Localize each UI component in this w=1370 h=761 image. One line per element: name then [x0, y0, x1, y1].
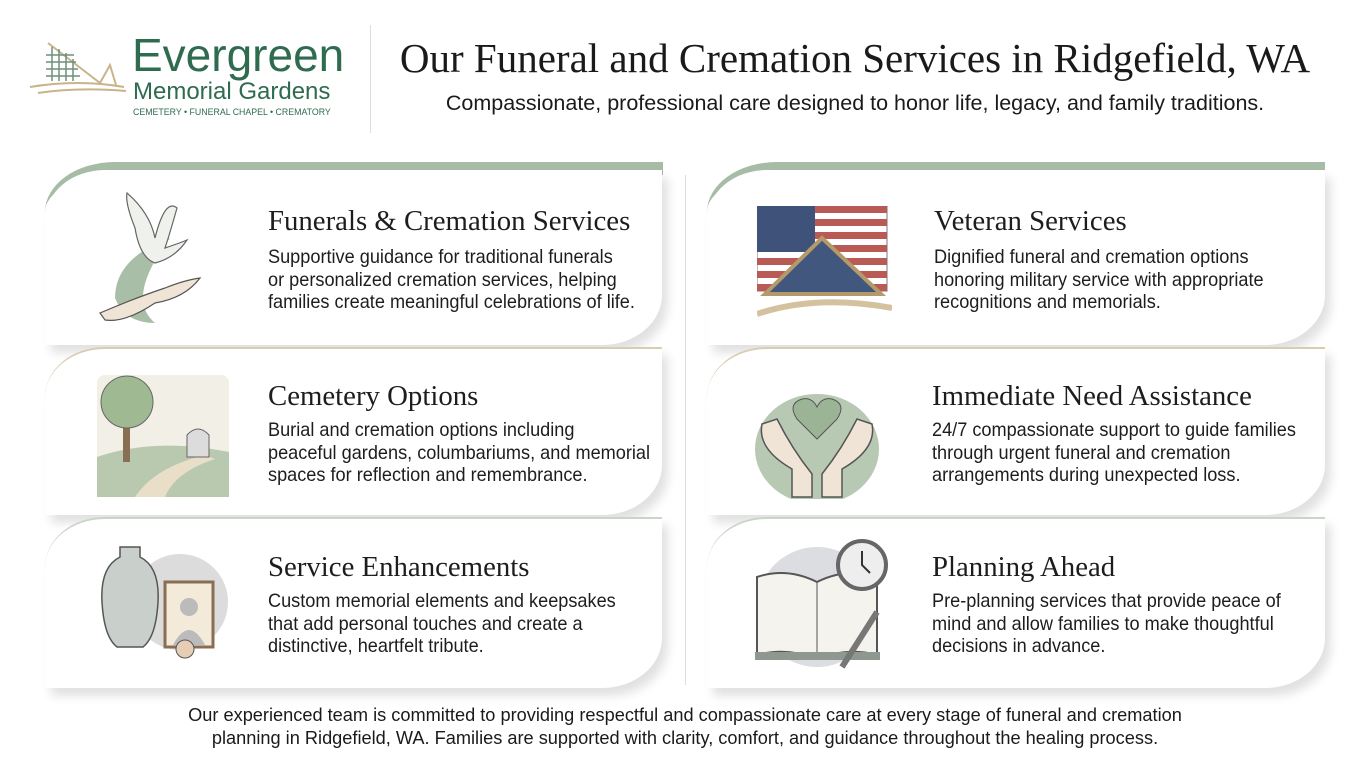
logo text: Evergreen — [132, 29, 344, 81]
panel: service enhancements: Custom memorial elements and keepsakes — [268, 590, 616, 612]
title: Our Funeral and Cremation Services in Ridgefield, WA — [400, 35, 1310, 81]
panel: funerals & cremation — [45, 170, 662, 345]
band left — [45, 162, 663, 222]
band right — [707, 162, 1325, 222]
icon: flag — [757, 206, 892, 317]
panel: cemetery options — [45, 347, 662, 515]
icon: logo mark — [30, 42, 126, 94]
panel: immediate need: through urgent funeral and cremation — [932, 442, 1230, 464]
panel: planning ahead — [707, 517, 1325, 688]
icon: dove and hands — [99, 192, 202, 323]
panel: immediate need: 24/7 compassionate support to guide families — [932, 419, 1296, 441]
panel: veteran services: Dignified funeral and cremation options — [934, 246, 1249, 268]
subtitle: Compassionate, professional care designed to honor life, legacy, and family traditions. — [446, 91, 1264, 115]
panel: immediate need: arrangements during unexpected loss. — [932, 464, 1240, 486]
icon: hands with heart — [755, 394, 879, 499]
panel: veteran services: recognitions and memorials. — [934, 291, 1161, 313]
logo: CEMETERY • FUNERAL CHAPEL • CREMATORY — [133, 107, 331, 117]
panel: service enhancements: Service Enhancements — [268, 551, 529, 583]
panel: immediate need: Immediate Need Assistance — [932, 380, 1252, 412]
panel: funerals & cremation: or personalized cremation services, helping — [268, 268, 617, 290]
panel: cemetery options: spaces for reflection and remembrance. — [268, 464, 588, 486]
footer text: planning in Ridgefield, WA. Families are supported with clarity, comfort, and guidance throughout the healing process. — [212, 728, 1158, 748]
panel: funerals & cremation: families create meaningful celebrations of life. — [268, 291, 635, 313]
panel: veteran services: honoring military service with appropriate — [934, 268, 1264, 290]
panel: cemetery options: Cemetery Options — [268, 380, 478, 412]
panel: planning ahead: decisions in advance. — [932, 635, 1105, 657]
panel: immediate need — [707, 347, 1325, 515]
panel: service enhancements: that add personal touches and create a — [268, 612, 583, 634]
footer text: Our experienced team is committed to providing respectful and compassionate care at every stage of funeral and cremation — [188, 705, 1182, 725]
icon: urn and frame — [101, 546, 228, 658]
panel: service enhancements — [45, 517, 662, 688]
panel: funerals & cremation: Funerals & Cremation Services — [268, 205, 630, 237]
panel: service enhancements: distinctive, heartfelt tribute. — [268, 635, 484, 657]
logo: Memorial Gardens — [133, 78, 330, 105]
panel: planning ahead: mind and allow families to make thoughtful — [932, 612, 1274, 634]
panel: cemetery options: Burial and cremation options including — [268, 419, 574, 441]
logo — [30, 29, 344, 117]
icon: book clock pen — [755, 539, 888, 668]
panel: planning ahead: Pre-planning services that provide peace of — [932, 590, 1281, 612]
panel: funerals & cremation: Supportive guidance for traditional funerals — [268, 246, 613, 268]
panel: veteran services — [707, 170, 1325, 345]
panel: cemetery options: peaceful gardens, columbariums, and memorial — [268, 442, 650, 464]
panel: planning ahead: Planning Ahead — [932, 551, 1115, 583]
icon: tree and headstone — [97, 375, 229, 497]
panel: veteran services: Veteran Services — [934, 205, 1127, 237]
footer text — [188, 705, 1182, 748]
